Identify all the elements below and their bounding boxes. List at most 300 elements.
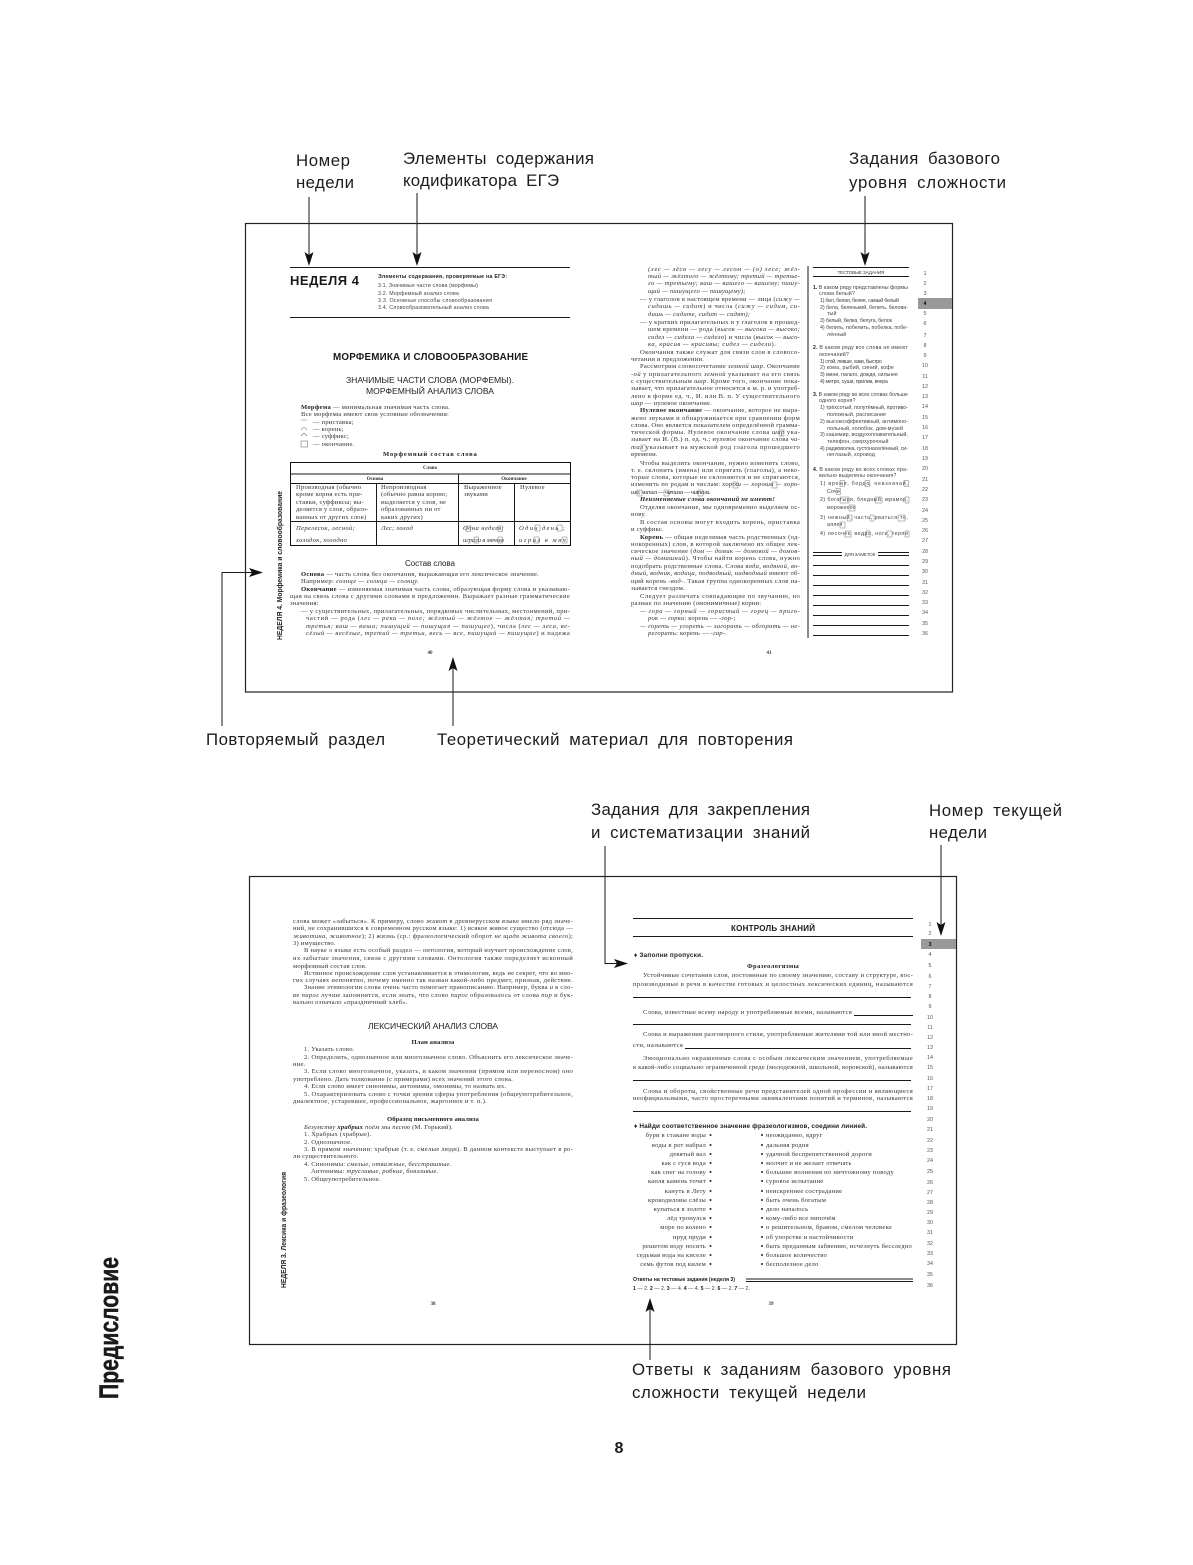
week index: нижний разворот: 36 (927, 1283, 933, 1289)
week index: верхний разворот: 35 (922, 621, 928, 627)
task: заполни пропуски: в какой-либо социально ограниченной среде (молодежной, школьной, воровской), называются (633, 1064, 913, 1071)
text: теория, правая страница: — гореть — угореть — загорать — обгорать — не- (639, 623, 800, 630)
text: теория, правая страница: ка, красив — красивы; сидел — сидели). (648, 341, 776, 348)
task: найди соответствие: кому-либо все нипочём (766, 1215, 836, 1222)
text: план анализа: 5. Охарактеризовать слово с точки зрения сферы употребления (общеупотребительное, (304, 1091, 573, 1098)
text: морфема и обозначения: — суффикс; (312, 433, 349, 440)
task: заполни пропуски: производимые в речи в качестве готовых и целостных лексических единиц, называются (633, 981, 913, 988)
week index: верхний разворот: 29 (922, 559, 928, 565)
panel: тестовые задания: 4) радиоволна, густонаселённый, си- (820, 445, 908, 452)
task: найди соответствие: об упорстве и настойчивости (766, 1234, 854, 1241)
task: найди соответствие: неожиданно, вдруг (766, 1132, 823, 1139)
text: теория, правая страница: регорать: корень — -гар-. (647, 630, 727, 637)
task: найди соответствие (634, 1122, 912, 1268)
divider between pages (807, 266, 809, 638)
week index: верхний разворот: 31 (922, 580, 928, 586)
task: заполни пропуски: Слова и выражения разговорного стиля, употребляемые жителями той или иной местно- (643, 1031, 913, 1038)
callout: ответы к заданиям: Ответы к заданиям базового уровня (632, 1360, 951, 1379)
answers: Ответы на тестовые задания (неделя 3) (633, 1277, 735, 1283)
text: состав слова: сёлый — весёлые, третий — третьи, весь — все, пишущий — пишущие) и падежа (306, 630, 570, 637)
arrow: задания для закрепления (605, 846, 628, 968)
callout: задания для закрепления (591, 800, 810, 842)
panel: тестовые задания: 1) бел, белая, белее, самый белый (820, 297, 899, 304)
week index: верхний разворот: 28 (922, 549, 928, 555)
text: теория, правая страница: шем времени — рода (высок — высока — высоко; (648, 326, 800, 333)
week index: нижний разворот: 31 (927, 1230, 933, 1236)
task: найди соответствие: пруд пруди (673, 1234, 706, 1241)
week index: нижний разворот: 21 (927, 1127, 933, 1133)
text: теория, правая страница: нову. (631, 511, 646, 518)
text: теория, правая страница: т. е. склонить (имена) или спрягать (глаголы), а неко- (631, 467, 800, 474)
task: найди соответствие: решетом воду носить (642, 1243, 706, 1250)
task: заполни пропуски (633, 952, 913, 1112)
panel: тестовые задания: 3) мини, пальто, дождя, сильнее (820, 372, 898, 378)
для заметок (813, 552, 909, 636)
text: теория, правая страница: — у глаголов в настоящем времени — лица (сижу — (639, 296, 800, 303)
week index: нижний разворот: 12 (927, 1035, 933, 1041)
header: неделя 4: 3.3. Основные способы словообразования (378, 298, 492, 304)
text: образец письменного анализа: Образец письменного анализа (387, 1116, 480, 1123)
table: морфемный состав: играла в мячом (463, 537, 505, 544)
answers: 1 — 2. 2 — 2. 3 — 4. 4 — 4. 5 — 2. 6 — 2. 7 — 2. (633, 1286, 750, 1292)
page number 40: 40 (428, 651, 433, 656)
text: морфема и обозначения: — корень; (312, 426, 344, 433)
header: неделя 4: НЕДЕЛЯ 4 (290, 273, 360, 288)
week index: верхний разворот: 13 (922, 394, 928, 400)
task: найди соответствие: молчит и не желает отвечать (766, 1160, 852, 1167)
task: заполни пропуски: Слова и обороты, свойственные речи представителей одной профессии и являющиеся (643, 1088, 913, 1095)
text: образец письменного анализа: 3. В прямом значении: храбрые (т. е. смелые люди). В данном контексте выступает в ро- (304, 1146, 573, 1153)
panel: тестовые задания: 2) богатыри, бледный, мрамор, (820, 496, 908, 503)
text: теория, правая страница: сическое значение (дом — домик — домовой — домов- (631, 548, 800, 555)
table: морфемный состав: Нулевое (520, 484, 545, 491)
task: найди соответствие: воды в рот набрал (652, 1142, 706, 1149)
table: морфемный состав: Производная (обычно (296, 484, 362, 491)
panel: тестовые задания: ТЕСТОВЫЕ ЗАДАНИЯ (838, 270, 885, 276)
для заметок: ДЛЯ ЗАМЕТОК (844, 552, 876, 558)
heading: лексический анализ слова: ЛЕКСИЧЕСКИЙ АНАЛИЗ СЛОВА (368, 1020, 498, 1031)
text: теория, правая страница (630, 266, 801, 637)
task: найди соответствие: неискреннее сострадание (766, 1188, 842, 1195)
text: план анализа: План анализа (412, 1039, 455, 1046)
text: теория, правая страница: Нулевое окончание — окончание, которое не выра- (640, 407, 800, 414)
task: заполни пропуски: ♦ Заполни пропуски. (634, 952, 703, 959)
callout: задания базового уровня: уровня сложности (849, 173, 1006, 192)
panel: тестовые задания: 3) нежный, часть, рваться-то, (820, 514, 908, 521)
table: морфемный состав: Основа (367, 477, 384, 482)
task: заполни пропуски: Устойчивые сочетания слов, постоянные по своему значению, составу и структуре, вос- (643, 972, 913, 979)
panel: тестовые задания (813, 268, 909, 636)
panel: тестовые задания: 1. В каком ряду представлены формы (813, 285, 908, 291)
text: теория, правая страница: Следует различать совпадающие по звучанию, но (640, 593, 800, 600)
week index: нижний разворот: 18 (927, 1096, 933, 1102)
week index: нижний разворот: 10 (927, 1015, 933, 1021)
table: морфемный состав (290, 462, 571, 546)
task: найди соответствие: море по колено (660, 1224, 706, 1231)
callout: номер текущей недели: недели (929, 823, 987, 842)
task: найди соответствие: семь футов под килем (640, 1261, 707, 1268)
text: теория, правая страница: тый — жёлтого — жёлтому; третий — третье- (648, 273, 800, 280)
callout: номер текущей недели: Номер текущей (929, 801, 1062, 820)
task: найди соответствие: как снег на голову (651, 1169, 707, 1176)
week index: нижний разворот: 14 (927, 1055, 933, 1061)
week index: нижний разворот: 1 (928, 922, 932, 928)
text: состав слова: Основа — часть слова без окончания, выражающая его лексическое значение. (301, 571, 539, 578)
table: морфемный состав: образованных ни от (381, 506, 441, 513)
week index: верхний разворот: 9 (924, 353, 926, 359)
callout: номер недели: недели (296, 173, 354, 192)
text: теория, правая страница: Неизменяемые слова окончаний не имеют! (639, 496, 775, 503)
callout: повторяемый раздел: Повторяемый раздел (206, 730, 385, 749)
text: теория, правая страница: -ой у прилагательного земной указывает на его связь (631, 371, 800, 378)
text: образец письменного анализа: 4. Синонимы: смелые, отважные, бесстрашные. (304, 1161, 452, 1168)
text: теория, правая страница: нокоренных) слов, в которой заключено их общее лек- (631, 541, 800, 548)
text: теория, правая страница: времени. (631, 451, 658, 458)
table: морфемный состав: Слово (423, 466, 437, 471)
text: план анализа: употреблено. Дать толкование (с примерами) всех значений этого слова. (293, 1076, 513, 1083)
panel: тестовые задания: польный, колобок, дом-музей (827, 425, 903, 432)
week index: верхний разворот: 10 (922, 363, 928, 369)
text: теория, правая страница: сидел — сидела — сидело) и числа (высок — высо- (648, 334, 800, 341)
arrow: тестовые задания (860, 196, 870, 266)
week index: нижний разворот: 24 (927, 1158, 933, 1164)
panel: нижний разворот (250, 876, 956, 1344)
text: теория, правая страница: Окончания также служат для связи слов в словосо- (640, 349, 800, 356)
heading: морфемный состав слова: Морфемный состав слова (383, 451, 478, 458)
panel: тестовые задания: мороженое (827, 505, 856, 511)
week index: верхний разворот: 20 (922, 466, 928, 472)
page number 8: 8 (615, 1440, 624, 1457)
heading: значимые части слова: ЗНАЧИМЫЕ ЧАСТИ СЛОВА (МОРФЕМЫ). (346, 375, 514, 385)
week index: верхний разворот: 23 (922, 497, 928, 503)
week index: нижний разворот: 4 (928, 952, 932, 958)
text: план анализа: 2. Определить, однозначное или многозначное слово. Объяснить его лексическое значе- (304, 1054, 573, 1061)
text: состав слова: значения: (290, 600, 319, 607)
arrow: номер недели (304, 197, 314, 266)
task: заполни пропуски: Фразеологизмы (747, 963, 799, 970)
week index: верхний разворот: 14 (922, 404, 928, 410)
text: образец письменного анализа: 2. Однозначное. (304, 1139, 352, 1146)
heading: контроль знаний: КОНТРОЛЬ ЗНАНИЙ (731, 924, 815, 933)
text: теория, правая страница: Чтобы выделить окончание, нужно изменить слово, (640, 460, 800, 467)
week index: верхний разворот: 18 (922, 446, 928, 452)
sidebar: неделя 4: НЕДЕЛЯ 4. Морфемика и словообразование (275, 491, 284, 640)
week index: нижний разворот: 13 (927, 1045, 933, 1051)
callout: задания базового уровня (849, 149, 1006, 192)
table: морфемный состав: Один день ; (519, 525, 565, 532)
text: теория, правая страница: шар — нулевое окончание. (631, 400, 712, 407)
text: теория, правая страница: торые слова, которые не склоняются и не спрягаются, (631, 474, 800, 481)
table: морфемный состав: каких других) (381, 514, 423, 521)
page number 38: 38 (430, 1302, 436, 1307)
task: найди соответствие: о решительном, бравом, смелом человеке (766, 1224, 892, 1231)
week index: верхний разворот: 27 (922, 538, 928, 544)
text: лексика, начало страницы: Знание этимологии слова очень часто помогает правописанию. Например, буква и в сло- (304, 984, 573, 991)
week index: нижний разворот (921, 922, 956, 1289)
week index: нижний разворот: 17 (927, 1086, 933, 1092)
week index: верхний разворот: 24 (922, 508, 928, 514)
callout: элементы содержания: кодификатора ЕГЭ (403, 171, 559, 190)
week index: верхний разворот: 34 (922, 610, 928, 616)
header: неделя 4 (290, 268, 570, 318)
text: морфема и обозначения (301, 404, 450, 448)
task: найди соответствие: крокодиловы слёзы (648, 1197, 706, 1204)
week index: верхний разворот: 26 (922, 528, 928, 534)
text: теория, правая страница: тал указывает на мужской род глагола прошедшего (631, 444, 800, 451)
heading: морфемика: МОРФЕМИКА И СЛОВООБРАЗОВАНИЕ (333, 352, 528, 363)
callout: номер недели: Номер (296, 151, 350, 170)
week index: верхний разворот: 22 (922, 487, 928, 493)
week index: нижний разворот: 6 (928, 974, 932, 980)
week index: нижний разворот: 30 (927, 1220, 933, 1226)
table: морфемный состав: Одна неделя; (463, 525, 504, 532)
task: найди соответствие: суровое испытание (766, 1178, 823, 1185)
task: найди соответствие: быть очень богатым (766, 1197, 827, 1204)
week index: нижний разворот: 32 (927, 1241, 933, 1247)
header: неделя 4: Элементы содержания, проверяемые на ЕГЭ: (378, 274, 507, 280)
heading: состав слова: Состав слова (405, 559, 456, 568)
week index: верхний разворот: 30 (922, 569, 928, 575)
panel: тестовые задания: 2) бела, беленький, белить, белова- (820, 304, 908, 311)
panel: тестовые задания: лённый (827, 331, 846, 338)
panel: тестовые задания: 1) стой, левше, хаки, быстро (820, 358, 882, 365)
week index: верхний разворот: 3 (924, 291, 926, 297)
table: морфемный состав: кроме корня есть при- (296, 491, 362, 498)
week index: верхний разворот: 4 (924, 301, 926, 307)
text: состав слова: третья; ваш — ваша; пишущий — пишущая — пишущее), числа (лес — леса, ве- (306, 623, 570, 630)
panel: тестовые задания: аллея (827, 522, 843, 528)
text: образец письменного анализа (293, 1116, 573, 1183)
table: морфемный состав: Непроизводная (381, 484, 427, 491)
week index: верхний разворот: 17 (922, 435, 928, 441)
week index: нижний разворот: 5 (928, 963, 932, 969)
week index: нижний разворот: 27 (927, 1190, 933, 1196)
text: теория, правая страница: лено в форме ед. ч., И. или В. п. У существительного (631, 393, 800, 400)
panel: тестовые задания: 2) кома, рыбий, синий, кофе (820, 364, 894, 371)
week index: верхний разворот: 8 (924, 343, 926, 349)
text: теория, правая страница: — у кратких прилагательных и у глаголов в прошед- (639, 319, 800, 326)
table: морфемный состав: выделяется у слов, не (381, 499, 446, 506)
text: лексика, начало страницы: 3) имущество. (293, 940, 336, 947)
panel: тестовые задания: 2. В каком ряду все слова не имеют (813, 345, 908, 351)
text: лексика, начало страницы (293, 918, 573, 1006)
week index: нижний разворот: 2 (928, 931, 932, 937)
week index: нижний разворот: 23 (927, 1148, 933, 1154)
week index: нижний разворот: 28 (927, 1200, 933, 1206)
text: теория, правая страница: дный, водник, водица, подводный, надводный имеют об- (631, 570, 800, 577)
text: теория, правая страница: жено звуками и обнаруживается при сравнении форм (630, 415, 801, 422)
answers (633, 1277, 913, 1292)
text: теория, правая страница: — гора — горный — гористый — горец — приго- (639, 608, 800, 615)
task: найди соответствие: девятый вал (670, 1151, 706, 1158)
task: найди соответствие: быть преданным забвению, исчезнуть бесследно (766, 1243, 912, 1250)
text: теория, правая страница: разные по значению (омонимичные) корни: (631, 600, 761, 607)
week index: нижний разворот: 25 (927, 1169, 933, 1175)
panel: верхний разворот (246, 224, 952, 692)
text: теория, правая страница: с существительным шар. Кроме того, окончание пока- (631, 378, 800, 385)
week index: нижний разворот: 29 (927, 1210, 933, 1216)
week index: верхний разворот: 32 (922, 590, 928, 596)
text: состав слова: щая на связь слова с другими словами в предложении. Выражает разные грамматические (290, 593, 570, 600)
panel: тестовые задания: слова белый? (819, 290, 855, 297)
table: морфемный состав: ванных от других слов) (296, 514, 366, 521)
text: морфема и обозначения: — окончание. (312, 441, 355, 448)
text: лексика, начало страницы: В науке о языке есть особый раздел — онтология, который изучает происхождение слов, (304, 947, 573, 954)
week index: нижний разворот: 33 (927, 1251, 933, 1257)
panel: тестовые задания: неглазый, хоровод (827, 451, 875, 458)
week index: нижний разворот: 9 (928, 1004, 932, 1010)
panel: тестовые задания: 2) высокоэффективный, антимоно- (820, 418, 908, 425)
panel: тестовые задания: 4) метро, суши, прилив, вчера (820, 379, 888, 385)
text: план анализа: 3. Если слово многозначное, указать, в каком значении (прямом или переносном) оно (304, 1068, 574, 1075)
text: теория, правая страница: и суффикс. (631, 526, 664, 533)
panel: тестовые задания: 3. В каком ряду во всех словах больше (813, 392, 908, 398)
week index: верхний разворот: 5 (924, 311, 926, 317)
text: состав слова: — у существительных, прилагательных, порядковых числительных, местоимений, при- (300, 608, 570, 615)
text: теория, правая страница: дишь — сидите, сидит — сидят); (648, 311, 750, 318)
text: теория, правая страница: подобрать родственные слова. Слова вода, водяной, во- (631, 563, 800, 570)
table: морфемный состав: холодок, холодно (295, 537, 348, 544)
panel: тестовые задания: одного корня? (819, 398, 856, 404)
task: найди соответствие: бесполезное дело (766, 1261, 819, 1268)
task: заполни пропуски: Слова, известные всему народу и употребляемые всеми, называются (643, 1009, 852, 1016)
text: теория, правая страница: четании и предложении. (631, 356, 704, 363)
table: морфемный состав: деляется у слов, образо- (296, 506, 369, 513)
task: найди соответствие: дело началось (766, 1206, 808, 1213)
task: найди соответствие: большие волнения по ничтожному поводу (766, 1169, 894, 1176)
text: лексика, начало страницы: Истинное происхождение слов устанавливается в этимологии, ведь не секрет, что во мно- (304, 970, 573, 977)
week index: верхний разворот: 6 (924, 321, 926, 327)
task: найди соответствие: седьмая вода на киселе (637, 1252, 706, 1259)
panel: тестовые задания: вильно выделены окончания? (819, 473, 896, 479)
week index: нижний разворот: 15 (927, 1065, 933, 1071)
table: морфемный состав: Перелесок, лесной; (295, 525, 355, 532)
task: найди соответствие: капля камень точит (648, 1178, 706, 1185)
week index: нижний разворот: 11 (927, 1025, 933, 1031)
week index: нижний разворот: 19 (927, 1106, 933, 1112)
task: найди соответствие: большое количество (766, 1252, 827, 1259)
week index: нижний разворот: 16 (927, 1076, 933, 1082)
arrow: номер текущей недели (936, 845, 946, 936)
header: неделя 4: 3.2. Морфемный анализ слова (378, 290, 459, 297)
sidebar: неделя 3: НЕДЕЛЯ 3. Лексика и фразеология (279, 1172, 288, 1288)
text: план анализа: 4. Если слово имеет синонимы, антонимы, омонимы, то назвать их. (304, 1083, 506, 1090)
week index: верхний разворот: 15 (922, 415, 928, 421)
text: морфема и обозначения: Морфема — минимальная значимая часть слова. (301, 404, 450, 411)
week index: нижний разворот: 7 (928, 984, 932, 990)
text: состав слова: Например: солнце — солнца — солнцу. (301, 578, 419, 585)
callout: номер текущей недели (929, 801, 1062, 842)
text: теория, правая страница: Корень — общая неделимая часть родственных (од- (640, 534, 800, 541)
text: образец письменного анализа: 5. Общеупотребительное. (304, 1176, 381, 1183)
callout: ответы к заданиям: сложности текущей недели (632, 1383, 866, 1402)
task: найди соответствие: кануть в Лету (665, 1188, 706, 1195)
table: морфемный состав: играл в мяч (519, 537, 566, 544)
text: состав слова: частий — рода (лес — река — поле; жёлтый — жёлтое — жёлтая; третий — (306, 615, 570, 622)
page number 41: 41 (766, 651, 772, 656)
week index: верхний разворот: 2 (924, 281, 926, 287)
callout: номер недели (296, 151, 354, 192)
panel: тестовые задания: телефон, сверхурочный (827, 438, 889, 445)
text: теория, правая страница: В состав основы могут входить корень, приставка (640, 519, 800, 526)
arrow: кодификатор (412, 193, 422, 266)
text: теория, правая страница: (лес — лёса — лесу — лесом — (о) лесе; жёл- (648, 266, 800, 273)
task: найди соответствие: купаться в золоте (654, 1206, 706, 1213)
table: морфемный состав: (обычно равна корню; (381, 491, 447, 498)
text: морфема и обозначения: Все морфемы имеют свои условные обозначения: (301, 411, 449, 418)
callout: элементы содержания (403, 149, 594, 190)
arrow: повторяемый раздел (222, 568, 263, 726)
text: теория, правая страница: щий — пишущего — пишущему); (648, 288, 746, 295)
table: морфемный состав: Лес; холод (380, 525, 413, 532)
callout: задания базового уровня: Задания базового (849, 149, 1000, 168)
arrow: ответы (646, 1298, 654, 1360)
text: теория, правая страница: изменить по родам и числам: хорош — хороша — хоро- (631, 481, 800, 488)
text: образец письменного анализа: ли существительного. (293, 1153, 359, 1160)
text: теория, правая страница: щий корень -вод-. Такая группа однокоренных слов на- (631, 578, 800, 585)
panel: тестовые задания: 4. В каком ряду во всех словах пра- (813, 467, 908, 473)
task: найди соответствие: лёд тронулся (667, 1215, 706, 1222)
text: теория, правая страница: Рассмотрим словосочетание земной шар. Окончание (640, 363, 800, 370)
task: найди соответствие: удачной беспрепятственной дороги (766, 1151, 872, 1158)
text: теория, правая страница: сидишь — сидит) и числа (сижу — сидим, си- (648, 303, 800, 310)
week index: нижний разворот: 8 (928, 994, 932, 1000)
text: образец письменного анализа: 1. Храбрых (храбрые). (304, 1131, 372, 1138)
text: теория, правая страница: зывает на И. (В.) п. ед. ч.; нулевое окончание слова чи- (631, 436, 800, 443)
week index: нижний разворот: 22 (927, 1138, 933, 1144)
week index: верхний разворот: 7 (924, 333, 926, 339)
week index: нижний разворот: 34 (927, 1261, 933, 1267)
panel: тестовые задания: положный, расписание (827, 411, 886, 418)
text: лексика, начало страницы: вально означало «праздничный хлеб». (293, 999, 408, 1006)
week index: верхний разворот: 25 (922, 518, 928, 524)
panel: тестовые задания: Сочи (827, 489, 840, 495)
header: неделя 4: 3.1. Значимые части слова (морфемы) (378, 283, 478, 289)
arrow: теоретический материал (448, 657, 458, 726)
text: состав слова: Окончание — изменяемая значимая часть слова, образующая форму слова и указываю- (301, 586, 570, 593)
text: образец письменного анализа: Безумству храбрых поём мы песню (М. Горький). (303, 1124, 453, 1131)
week index: верхний разворот: 33 (922, 600, 928, 606)
task: найди соответствие: бури в стакане воды (646, 1132, 706, 1139)
text: состав слова (290, 571, 570, 637)
callout: ответы к заданиям (632, 1360, 951, 1402)
task: заполни пропуски: сти, называются (633, 1042, 683, 1049)
page number 39: 39 (768, 1302, 774, 1307)
text: план анализа (293, 1039, 574, 1105)
task: заполни пропуски: неофициальными, часто просторечными эквивалентами понятий и терминов, называются (633, 1095, 913, 1102)
panel: тестовые задания: 1) трёхсотый, полутёмный, противо- (820, 404, 908, 411)
week index: нижний разворот: 26 (927, 1180, 933, 1186)
week index: верхний разворот: 12 (922, 384, 928, 390)
panel: тестовые задания: 4) белить, побелить, побелка, побе- (820, 325, 908, 331)
week index: нижний разворот: 35 (927, 1272, 933, 1278)
text: лексика, начало страницы: их забытые значения, связи с другими словами. Онтология также определяет исконный (293, 955, 573, 962)
heading: контроль знаний (633, 918, 913, 936)
task: заполни пропуски: Эмоционально окрашенные слова с особым лексическим значением, употребляемые (643, 1055, 913, 1062)
table: морфемный состав: ставки, суффиксы; вы- (296, 499, 364, 506)
week index: верхний разворот: 1 (924, 271, 926, 277)
section title: предисловие: Предисловие (94, 1257, 124, 1399)
callout: задания для закрепления: и систематизации знаний (591, 823, 810, 842)
text: теория, правая страница: зывает, что прилагательное относится к м. р. и употреб- (631, 385, 800, 392)
heading: значимые части слова (346, 375, 514, 396)
text: лексика, начало страницы: морфемный состав слов. (293, 963, 367, 970)
text: план анализа: ние. (293, 1061, 306, 1068)
panel: тестовые задания: 3) белый, белка, белуга, белок (820, 317, 893, 324)
panel: тестовые задания: тый (827, 310, 837, 317)
text: теория, правая страница: слова. Оно является показателем определённой грамма- (631, 422, 800, 429)
task: найди соответствие: дальняя родня (766, 1142, 809, 1149)
